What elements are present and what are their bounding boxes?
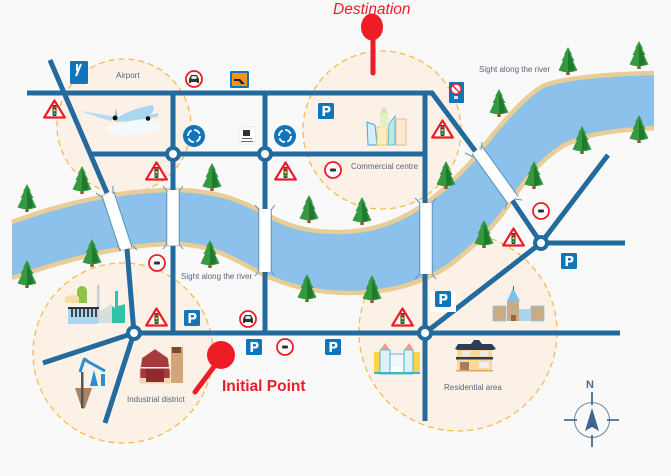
icon: barn and silo	[140, 347, 183, 383]
area: industrial district zone	[33, 263, 213, 443]
icon: blue road sign	[70, 61, 88, 84]
icon: hospital building	[374, 343, 420, 374]
icon: office towers	[367, 107, 406, 145]
label: residential area: Residential area	[444, 383, 502, 392]
area: airport zone	[57, 59, 191, 193]
label: sight along the river middle: Sight along the river	[181, 272, 252, 281]
label: commercial centre: Commercial centre	[351, 162, 419, 171]
icon: house	[455, 340, 496, 372]
bridges	[96, 142, 522, 279]
title: initial point: Initial Point	[222, 378, 306, 395]
destination pin	[361, 14, 383, 73]
icon: school building	[493, 286, 544, 321]
area: commercial centre zone	[303, 51, 461, 209]
icon: orange sign	[230, 71, 249, 88]
initial point pin	[195, 341, 235, 392]
compass	[564, 379, 619, 447]
trees	[18, 41, 648, 303]
speed signs	[149, 162, 549, 355]
compass: N	[586, 379, 594, 391]
junctions	[128, 148, 547, 339]
label: sight along the river top: Sight along the river	[479, 65, 550, 74]
icon: airplane on cloud	[81, 105, 160, 135]
roads	[27, 60, 625, 423]
traffic light signs	[44, 100, 524, 326]
icon: oil pump	[75, 359, 105, 409]
parking signs	[184, 103, 577, 355]
icon: camera notice sign	[239, 127, 255, 144]
icon: no smoking sign	[449, 82, 464, 103]
area: residential zone	[359, 233, 557, 431]
no car signs	[186, 71, 256, 327]
icon: factory	[65, 285, 125, 324]
title: destination: Destination	[333, 1, 411, 18]
river	[12, 73, 654, 293]
label: industrial district: Industrial district	[127, 395, 186, 404]
label: airport: Airport	[116, 71, 140, 80]
roundabout signs	[183, 125, 296, 147]
